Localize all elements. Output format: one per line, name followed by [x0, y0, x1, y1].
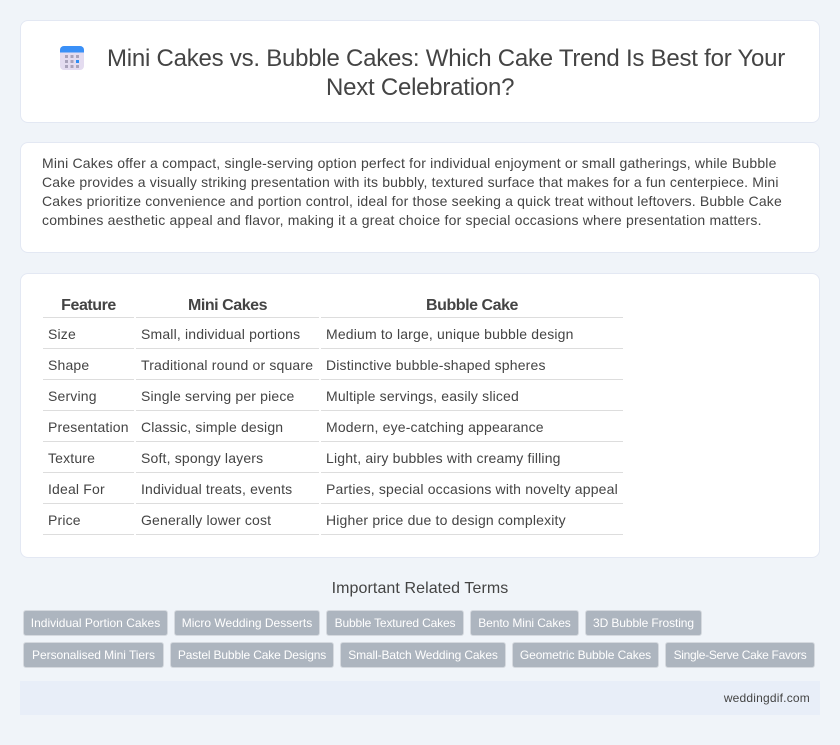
comparison table: Medium to large, unique bubble design: [326, 326, 574, 342]
related terms heading: Important Related Terms: [332, 580, 508, 597]
related term tags: Pastel Bubble Cake Designs: [178, 648, 326, 662]
related term tags: Individual Portion Cakes: [31, 616, 160, 630]
title: Mini Cakes vs. Bubble Cakes: Which Cake Trend Is Best for Your: [107, 45, 785, 72]
comparison table: Feature: [61, 297, 116, 314]
comparison table: Higher price due to design complexity: [326, 512, 566, 528]
intro paragraph: Mini Cakes offer a compact, single-serving option perfect for individual enjoyment or small gatherings, while Bubble: [42, 155, 777, 171]
comparison table: Distinctive bubble-shaped spheres: [326, 357, 546, 373]
related term tags: Single-Serve Cake Favors: [674, 648, 806, 662]
comparison table panel: [20, 273, 820, 558]
intro panel: [20, 142, 820, 253]
comparison table: [43, 297, 623, 535]
related term tags: Bento Mini Cakes: [478, 616, 571, 630]
comparison table: Individual treats, events: [141, 481, 292, 497]
comparison table: Size: [48, 326, 76, 342]
comparison table: Modern, eye-catching appearance: [326, 419, 544, 435]
intro paragraph: Cakes prioritize convenience and portion control, ideal for those seeking a quick treat without leftovers. Bubble Cake: [42, 193, 782, 209]
comparison table: Ideal For: [48, 481, 105, 497]
comparison table: Bubble Cake: [426, 297, 518, 314]
comparison table: Parties, special occasions with novelty appeal: [326, 481, 618, 497]
related term tags: Bubble Textured Cakes: [335, 616, 455, 630]
comparison table: Traditional round or square: [141, 357, 313, 373]
intro paragraph: combines aesthetic appeal and flavor, making it a great choice for special occasions where presentation matters.: [42, 212, 762, 228]
intro paragraph: [42, 155, 782, 228]
comparison table: Classic, simple design: [141, 419, 283, 435]
comparison table: Soft, spongy layers: [141, 450, 263, 466]
comparison table: Multiple servings, easily sliced: [326, 388, 519, 404]
footer bar: [20, 681, 820, 715]
comparison table: Shape: [48, 357, 89, 373]
related term tags: Personalised Mini Tiers: [32, 648, 155, 662]
intro paragraph: Cake provides a visually striking presentation with its bubbly, textured surface that makes for a fun centerpiece. Mini: [42, 174, 779, 190]
comparison table: Single serving per piece: [141, 388, 294, 404]
comparison table: Mini Cakes: [188, 297, 267, 314]
comparison table: Generally lower cost: [141, 512, 271, 528]
footer source text: weddingdif.com: [724, 691, 810, 705]
comparison table: Light, airy bubbles with creamy filling: [326, 450, 561, 466]
icon: calendar: [60, 46, 84, 70]
title: [107, 45, 785, 101]
comparison table: Texture: [48, 450, 95, 466]
comparison table: Serving: [48, 388, 97, 404]
title: Next Celebration?: [326, 74, 514, 101]
header panel: [20, 20, 820, 123]
comparison table: Price: [48, 512, 81, 528]
related term tags: Geometric Bubble Cakes: [520, 648, 651, 662]
related term tags: [23, 610, 815, 668]
related term tags: 3D Bubble Frosting: [593, 616, 694, 630]
comparison table: Presentation: [48, 419, 129, 435]
comparison table: Small, individual portions: [141, 326, 300, 342]
related term tags: Small-Batch Wedding Cakes: [348, 648, 498, 662]
related term tags: Micro Wedding Desserts: [182, 616, 312, 630]
